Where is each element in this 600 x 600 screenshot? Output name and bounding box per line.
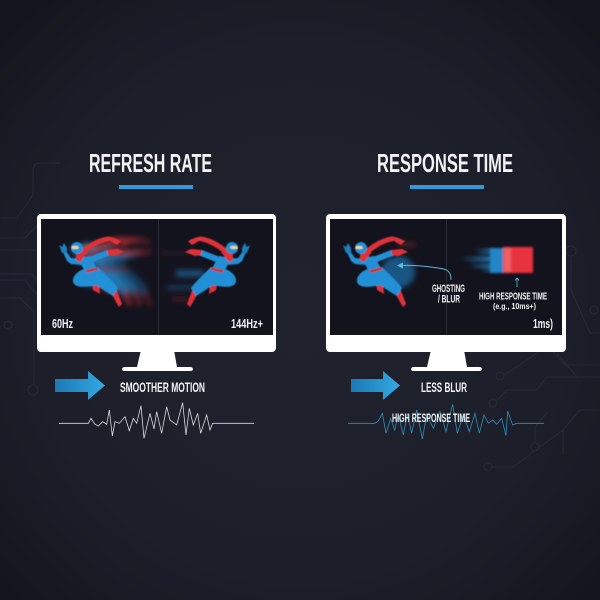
label: high response time: HIGH RESPONSE TIME (479, 290, 547, 302)
heading: response time: RESPONSE TIME (377, 148, 513, 178)
blurred block: high response time (460, 247, 533, 273)
monitor frame (326, 214, 566, 352)
ninja: 144Hz (185, 236, 250, 307)
waveform: white (59, 403, 254, 438)
label: overlay high response time: HIGH RESPONSE TIME (392, 411, 470, 425)
label: ghosting / blur (432, 283, 465, 306)
label: smoother motion: SMOOTHER MOTION (120, 379, 205, 395)
monitor frame (37, 214, 276, 352)
label: 60Hz: 60Hz (52, 316, 73, 331)
ghost trail: 60Hz (69, 236, 154, 307)
label: less blur: LESS BLUR (421, 379, 467, 395)
monitor stand (411, 350, 482, 371)
waveform: blue (348, 404, 544, 439)
label: 144Hz+: 144Hz+ (231, 316, 263, 331)
ghost trail: ninja (381, 243, 416, 288)
ninja: 60Hz (59, 236, 124, 307)
monitor screen (41, 219, 273, 335)
label: 1ms: 1ms) (533, 316, 553, 331)
label: high response time: (e.g., 10ms+) (493, 301, 536, 311)
panel: response time monitor (326, 214, 566, 371)
arrow: ghosting pointer (398, 263, 451, 280)
arrow: up to block (515, 278, 519, 287)
monitor stand (122, 350, 193, 371)
panel: refresh rate monitor (37, 214, 276, 371)
label: high response time (479, 290, 547, 311)
ninja: response time (343, 236, 408, 307)
arrow: smoother motion (55, 371, 105, 400)
arrow: less blur (351, 371, 400, 400)
label: ghosting / blur: / BLUR (438, 294, 460, 306)
underline: response time (410, 185, 484, 189)
underline: refresh rate (119, 185, 193, 189)
ghost trail: 144Hz (160, 252, 204, 302)
heading: refresh rate: REFRESH RATE (89, 148, 212, 178)
circuit board traces (0, 163, 600, 471)
monitor screen (330, 219, 562, 335)
label: ghosting / blur: GHOSTING (432, 283, 465, 295)
